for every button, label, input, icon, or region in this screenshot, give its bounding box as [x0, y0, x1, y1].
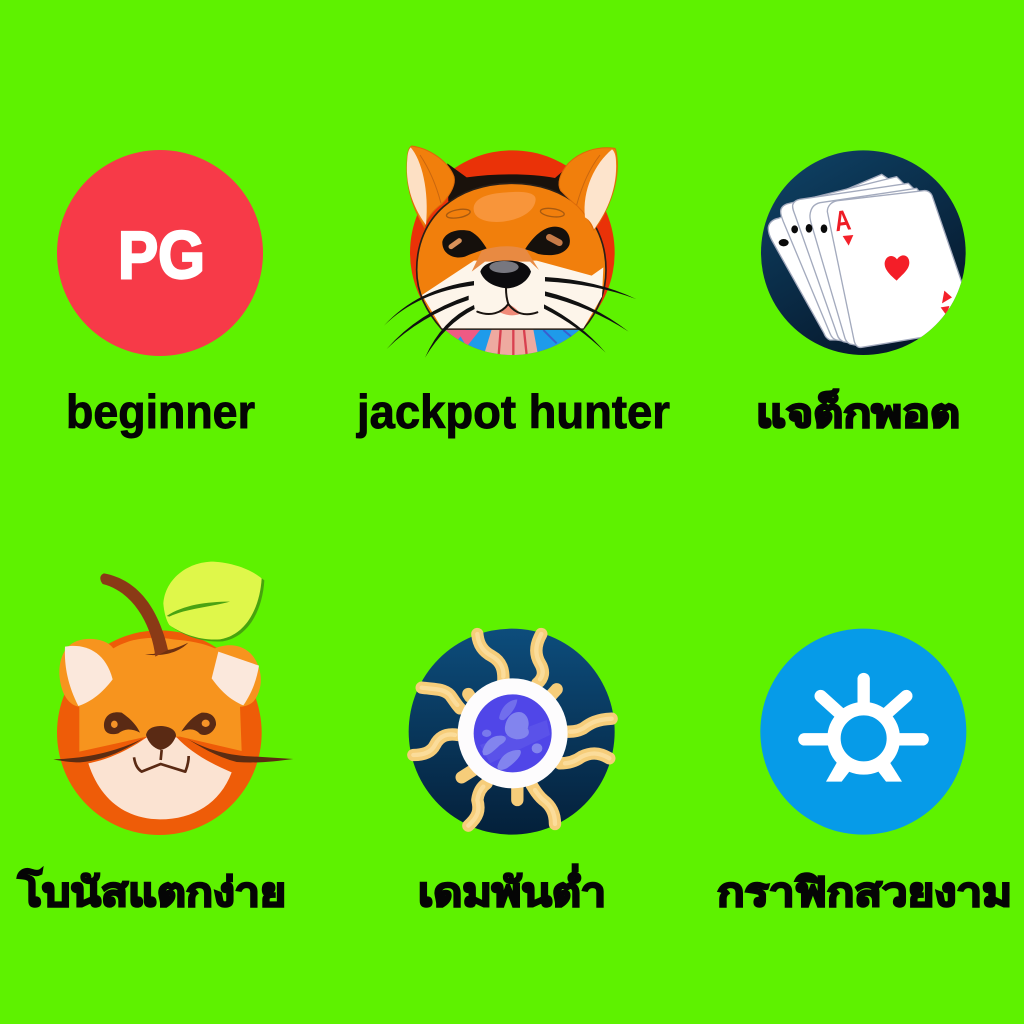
icon: PG beginner [57, 150, 263, 356]
icon: playing cards [761, 150, 967, 355]
icon: noodles and planet [409, 629, 615, 835]
label: beautiful graphics (Thai): กราฟิกสวยงาม [717, 871, 1012, 915]
label: easy bonus (Thai): โบนัสแตกง่าย [17, 869, 286, 915]
icon: orange fox [53, 562, 293, 835]
icon: fox jackpot hunter [384, 146, 636, 358]
label: beginner: beginner [66, 385, 255, 438]
label: jackpot hunter: jackpot hunter [356, 385, 670, 438]
icon: ship wheel [760, 629, 966, 835]
icon: PG beginner: PG [118, 218, 205, 293]
label: low bet (Thai): เดมพันต่ำ [418, 864, 606, 915]
icon: playing cards: A [833, 204, 853, 238]
label: jackpot (Thai): แจต็กพอต [756, 388, 960, 436]
